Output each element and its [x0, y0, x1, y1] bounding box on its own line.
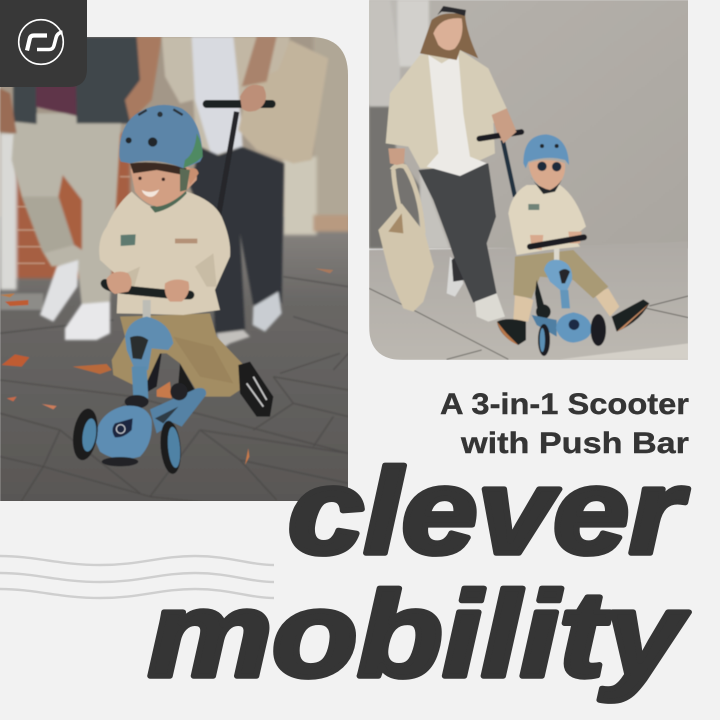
headline: mobility [148, 566, 690, 702]
child [497, 134, 649, 345]
photo: mother pushing child on scooter [369, 0, 689, 360]
subheading [440, 388, 689, 460]
scooter [70, 272, 206, 475]
wavy decorative lines [0, 556, 274, 598]
wall and floor [369, 0, 689, 360]
shoe [238, 362, 273, 417]
sweatshirt [99, 192, 230, 315]
leaves [0, 268, 333, 465]
scooter [530, 237, 606, 356]
logo tile [0, 0, 87, 87]
man in jacket and beige trousers [0, 37, 162, 340]
collar [150, 188, 187, 213]
push bar [479, 125, 521, 197]
woman [386, 6, 517, 322]
child [99, 105, 273, 417]
helmet [119, 105, 203, 168]
handlebar and hands [105, 283, 190, 295]
subheading: A 3-in-1 Scooter [440, 388, 689, 421]
face [131, 163, 197, 207]
pavement [0, 33, 350, 503]
trousers [112, 313, 248, 397]
photo: child riding scooter with family behind [0, 33, 350, 503]
headline [148, 443, 690, 702]
background wall, pillar and brick [0, 33, 350, 290]
far foot [147, 353, 162, 392]
woman with bag and dark trousers [162, 37, 328, 350]
tote bag [378, 166, 434, 312]
headline: clever [288, 443, 689, 579]
push bar [207, 85, 272, 217]
subheading: with Push Bar [460, 427, 689, 460]
